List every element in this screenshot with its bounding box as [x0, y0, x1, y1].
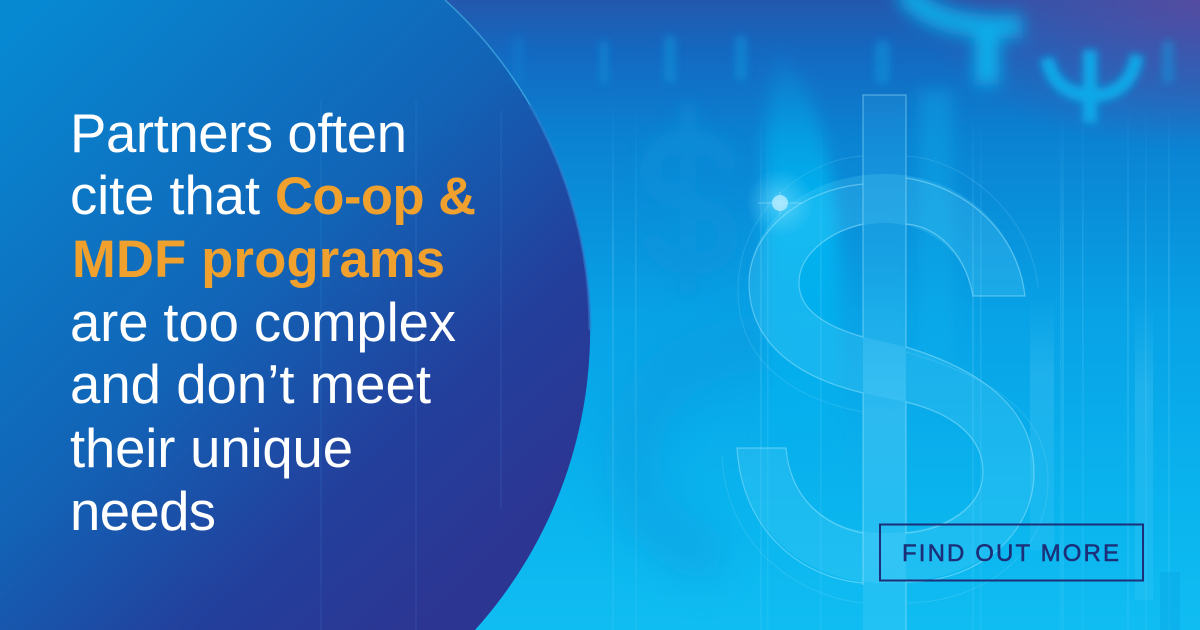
- heading: Co-op &: [275, 167, 476, 226]
- heading: cite that: [70, 165, 260, 226]
- icon: blurred dollar left: [680, 116, 696, 142]
- dollar outer echo outline: [722, 156, 1048, 603]
- heading: are too complex: [70, 292, 456, 353]
- button: find out more: [880, 524, 1143, 580]
- heading: needs: [70, 481, 216, 542]
- heading: Partners often: [70, 103, 407, 164]
- icon: light flare: [746, 169, 814, 237]
- heading: [70, 103, 476, 542]
- dollar S body: [737, 174, 1034, 583]
- blurred background currency symbols: [600, 0, 1174, 560]
- icon: blurred dollar right: [1047, 50, 1137, 123]
- vertical light streaks: [612, 45, 1180, 630]
- dollar outlines: [737, 95, 1034, 630]
- large soft shadow dollar: [617, 421, 712, 570]
- icon: main dollar sign: [722, 95, 1048, 630]
- panel: circle: [0, 0, 590, 630]
- heading: and don’t meet: [70, 354, 431, 415]
- heading: MDF programs: [72, 230, 445, 289]
- icon: blurred dollar top: [905, 0, 1022, 85]
- button: find out more: FIND OUT MORE: [902, 540, 1119, 567]
- dollar bar: [863, 95, 906, 630]
- heading: their unique: [70, 418, 353, 479]
